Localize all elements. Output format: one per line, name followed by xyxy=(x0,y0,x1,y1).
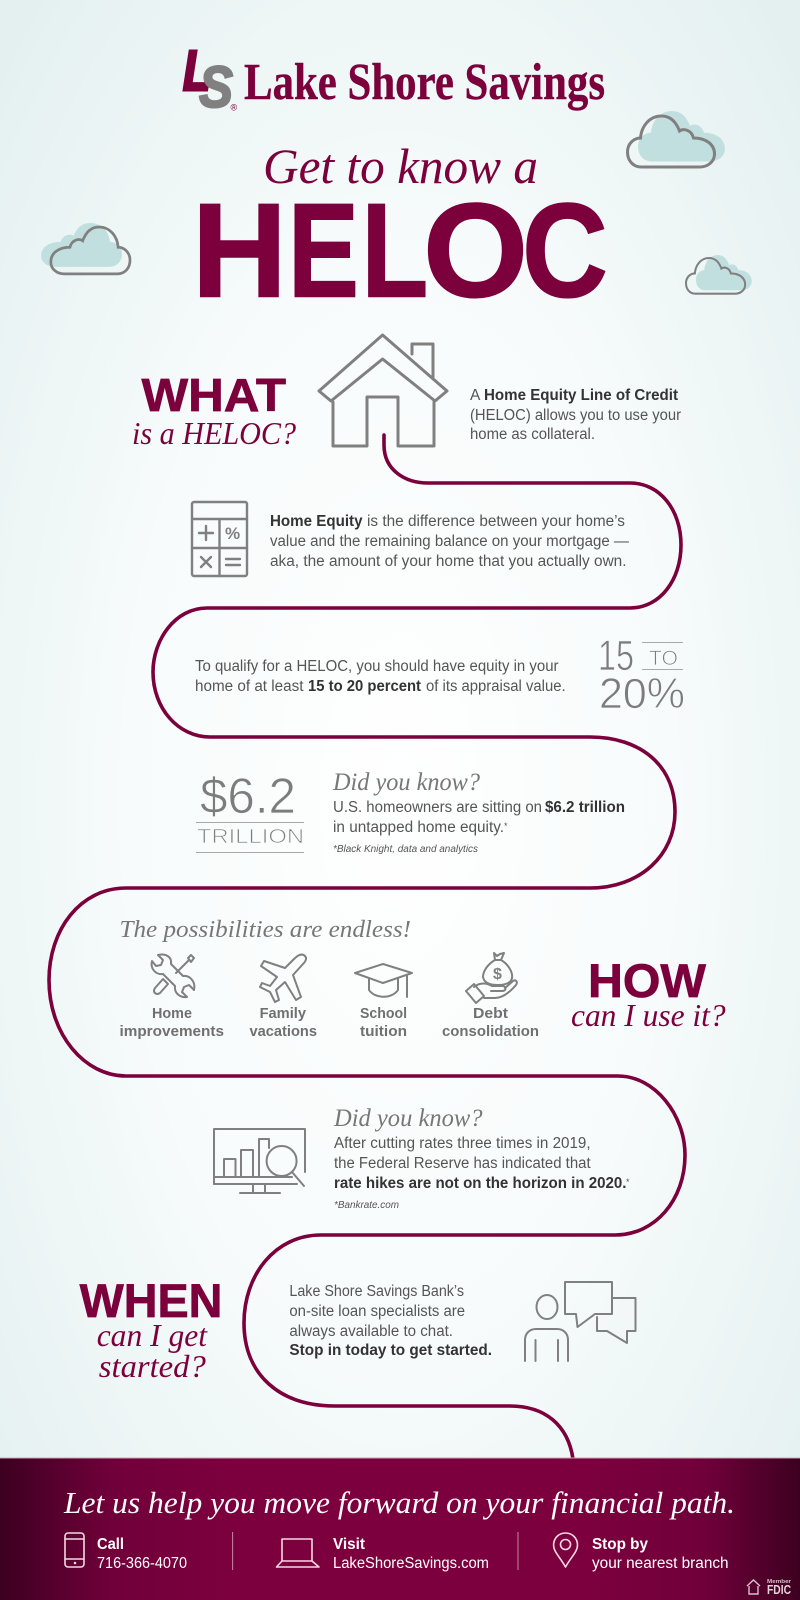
label: school tuition: tuition xyxy=(360,1023,407,1040)
text: home equity: Home Equity xyxy=(270,513,363,530)
title xyxy=(192,175,608,326)
text: loan specialists xyxy=(289,1283,492,1359)
text: home equity: is the difference between your home’s xyxy=(367,513,625,530)
contact: call: 716-366-4070 xyxy=(97,1555,187,1572)
text: loan specialists: Stop in today to get started. xyxy=(289,1342,492,1359)
title: L xyxy=(361,175,428,325)
heading: what: WHAT xyxy=(142,369,286,421)
stat: 6.2 trillion: TRILLION xyxy=(197,826,304,848)
label: family vacations xyxy=(250,1005,317,1040)
text: did you know rates: rate hikes are not on the horizon in 2020. xyxy=(334,1175,626,1192)
contact: stop by: your nearest branch xyxy=(592,1555,729,1572)
logo xyxy=(183,39,605,120)
stat: 15 to 20 percent xyxy=(598,632,685,718)
text: loan specialists: on-site loan specialists are xyxy=(289,1303,465,1320)
text: home equity: aka, the amount of your home that you actually own. xyxy=(270,553,626,570)
heading: how xyxy=(571,954,726,1033)
icon: graduation cap xyxy=(355,964,412,997)
icon: calculator xyxy=(192,502,247,576)
stat: 15 to 20 percent: TO xyxy=(649,647,678,670)
text: heloc definition: (HELOC) allows you to use your xyxy=(470,407,681,424)
text: qualify: of its appraisal value. xyxy=(426,678,566,695)
text: heloc definition: home as collateral. xyxy=(470,426,595,443)
label: family vacations: vacations xyxy=(250,1023,317,1040)
footer headline: Let us help you move forward on your financial path. xyxy=(63,1485,735,1520)
icon: money bag and hand xyxy=(466,953,517,1003)
label: school tuition: School xyxy=(360,1005,407,1022)
contact: stop by xyxy=(554,1533,729,1572)
title: O xyxy=(423,176,528,325)
cloud: left xyxy=(41,223,130,274)
label: home improvements xyxy=(120,1005,224,1040)
label: debt consolidation: consolidation xyxy=(442,1023,539,1040)
text: qualify: To qualify for a HELOC, you should have equity in your xyxy=(195,658,558,675)
text: did you know trillion: *Black Knight, data and analytics xyxy=(333,844,478,855)
cloud: right small xyxy=(686,255,752,294)
text: did you know trillion: $6.2 trillion xyxy=(545,799,625,816)
stat: 6.2 trillion: $6.2 xyxy=(200,768,296,824)
icon: calculator: % xyxy=(225,524,240,543)
footer band xyxy=(0,1458,800,1600)
fdic badge: Member xyxy=(767,1579,792,1585)
stat: 6.2 trillion xyxy=(196,768,304,852)
logo: Lake Shore Savings xyxy=(244,54,605,111)
text: did you know rates: the Federal Reserve has indicated that xyxy=(334,1155,591,1172)
stat: 15 to 20 percent: 20% xyxy=(599,670,685,718)
text: did you know trillion: * xyxy=(504,821,508,831)
text: heloc definition: A xyxy=(470,387,481,404)
text: home equity xyxy=(270,513,629,570)
heading: how: HOW xyxy=(588,954,707,1007)
logo: ® xyxy=(230,102,238,112)
logo: S xyxy=(199,55,233,120)
label: debt consolidation: Debt xyxy=(473,1005,508,1022)
title: H xyxy=(192,176,287,326)
contact: stop by: Stop by xyxy=(592,1536,648,1553)
text: did you know rates: *Bankrate.com xyxy=(334,1200,399,1211)
text: did you know trillion: U.S. homeowners are sitting on xyxy=(333,799,542,816)
contact: visit: LakeShoreSavings.com xyxy=(333,1555,489,1572)
text: did you know rates: After cutting rates three times in 2019, xyxy=(334,1135,591,1152)
text: did you know trillion: in untapped home equity. xyxy=(333,819,504,836)
label: debt consolidation xyxy=(442,1005,539,1040)
contact: call: Call xyxy=(97,1536,124,1553)
text: did you know trillion: Did you know? xyxy=(332,769,480,796)
stat: 15 to 20 percent: 15 xyxy=(598,632,634,680)
subtitle: Get to know a xyxy=(263,138,538,194)
contact: visit: Visit xyxy=(333,1536,365,1553)
heading: when: can I get xyxy=(97,1317,208,1353)
heading: when xyxy=(80,1274,222,1384)
text: heloc definition xyxy=(470,387,681,443)
contact: call xyxy=(65,1533,187,1572)
fdic badge: FDIC xyxy=(767,1582,791,1597)
icon: person with speech bubbles xyxy=(525,1282,636,1361)
label: home improvements: Home xyxy=(152,1005,192,1022)
text: qualify: 15 to 20 percent xyxy=(308,678,421,695)
text: did you know rates xyxy=(333,1105,630,1211)
label: school tuition xyxy=(360,1005,407,1040)
icon: tools xyxy=(152,954,194,997)
icon: house xyxy=(319,335,447,446)
label: home improvements: improvements xyxy=(120,1023,224,1040)
text: heloc definition: Home Equity Line of Credit xyxy=(484,387,678,404)
contact: visit xyxy=(276,1536,489,1572)
text: loan specialists: Lake Shore Savings Bank’s xyxy=(289,1283,464,1300)
text: qualify xyxy=(195,658,566,695)
icon: monitor chart xyxy=(214,1129,305,1193)
text: did you know rates: * xyxy=(626,1177,630,1187)
heading: when: WHEN xyxy=(80,1274,222,1327)
heading: what: is a HELOC? xyxy=(132,415,296,451)
label: family vacations: Family xyxy=(260,1005,307,1022)
icon: plane xyxy=(260,955,306,1002)
winding path xyxy=(49,435,685,1459)
title: E xyxy=(288,176,359,325)
cloud: top right xyxy=(628,111,725,167)
heading: how: can I use it? xyxy=(571,997,726,1033)
title: C xyxy=(522,175,608,325)
text: loan specialists: always available to chat. xyxy=(289,1323,453,1340)
text: qualify: home of at least xyxy=(195,678,304,695)
fdic badge xyxy=(747,1579,792,1597)
heading: when: started? xyxy=(99,1348,206,1384)
logo: L xyxy=(183,39,211,102)
icon: money bag and hand: $ xyxy=(493,966,502,983)
heading: what xyxy=(132,369,296,451)
heading: possibilities: The possibilities are endless! xyxy=(120,917,411,943)
text: did you know rates: Did you know? xyxy=(333,1105,483,1132)
text: did you know trillion xyxy=(332,769,625,855)
text: home equity: value and the remaining balance on your mortgage — xyxy=(270,533,629,550)
